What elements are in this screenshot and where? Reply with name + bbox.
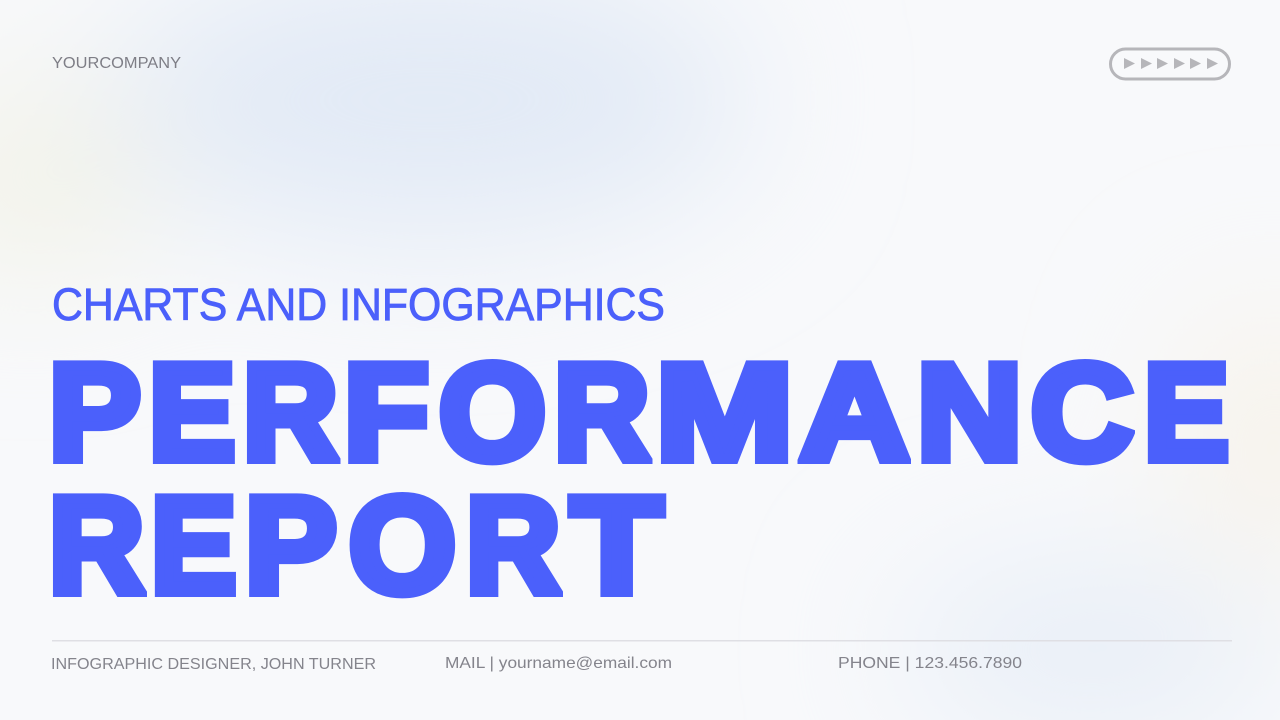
main title: performance: E	[1144, 336, 1229, 488]
main title: performance: A	[800, 336, 909, 488]
main title: performance: O	[438, 336, 545, 488]
main title: performance: R	[243, 336, 338, 488]
company name: YOURCOMPANY	[52, 55, 181, 72]
footer: mail: MAIL | yourname@email.com	[445, 655, 672, 672]
main title: performance: N	[917, 336, 1022, 488]
main title: performance: F	[344, 336, 429, 488]
main title: report: R	[466, 469, 560, 621]
main title: report	[49, 469, 666, 621]
main title: report: E	[150, 469, 236, 621]
main title: performance	[49, 336, 1229, 488]
icon: arrows pill badge	[1110, 49, 1230, 79]
main title: report: O	[349, 469, 456, 621]
main title: performance: M	[656, 336, 793, 488]
footer: designer: INFOGRAPHIC DESIGNER, JOHN TURNER	[51, 656, 376, 673]
main title: report: R	[49, 469, 144, 621]
main title: performance: C	[1031, 336, 1133, 488]
main title: report: T	[571, 469, 662, 621]
main title: performance: P	[49, 336, 141, 488]
main title: performance: E	[149, 336, 235, 488]
main title: performance: R	[554, 336, 650, 488]
subtitle: CHARTS AND INFOGRAPHICS	[52, 279, 665, 330]
main title: report: P	[245, 469, 337, 621]
footer: phone: PHONE | 123.456.7890	[838, 655, 1022, 672]
